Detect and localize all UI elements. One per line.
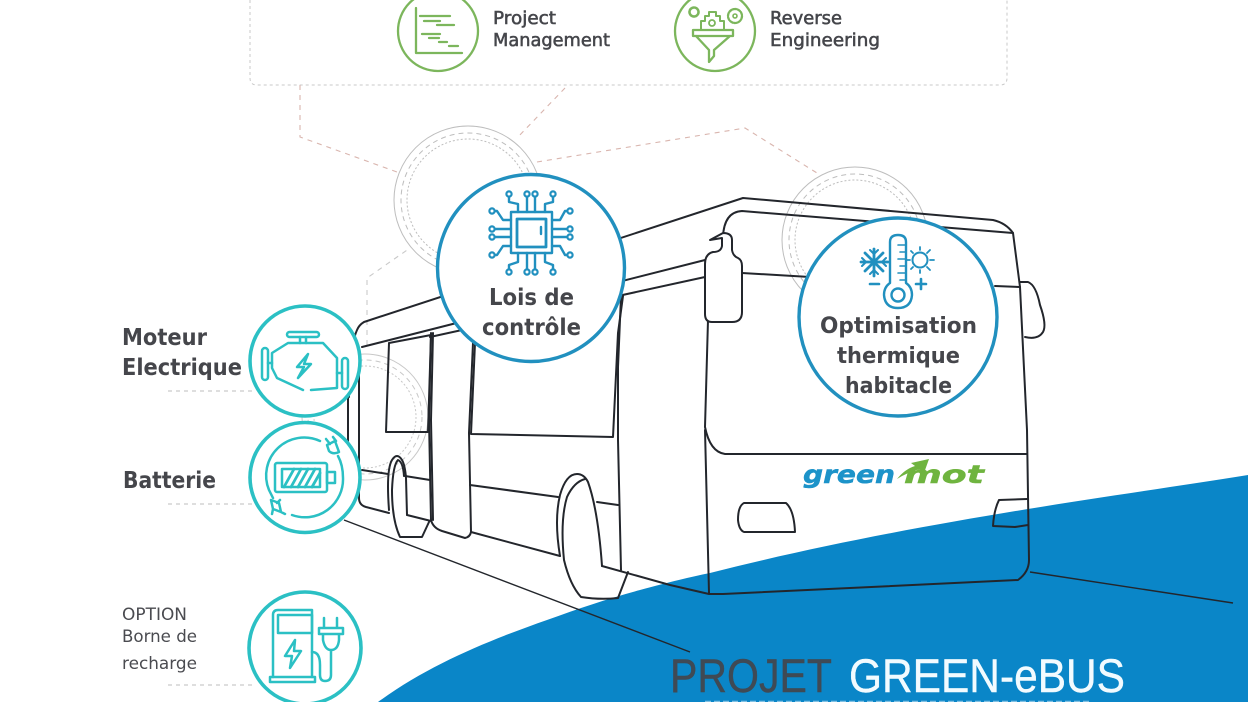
icon: thermometer with snow and sun — [861, 235, 934, 308]
label: electric motor: Moteur — [122, 325, 208, 351]
project title: GREEN-eBUS — [849, 649, 1125, 702]
left mirror — [705, 233, 742, 322]
label: charging station option: recharge — [122, 654, 197, 673]
decorative ring: powertrain — [302, 354, 428, 480]
icon: battery with charging cable — [250, 422, 360, 532]
door — [429, 333, 473, 538]
clipped subtitle strip — [705, 700, 1090, 702]
icon: engine — [250, 306, 360, 416]
label: project management: Project — [493, 9, 556, 29]
belt lines — [362, 470, 388, 474]
greenmot logo: mot — [904, 460, 986, 489]
electric motor item — [122, 306, 360, 416]
greenmot logo: green — [803, 460, 895, 489]
top services panel outline — [250, 0, 1007, 85]
icon: charging station — [249, 592, 361, 702]
icon: microchip — [489, 191, 573, 275]
body pillar — [618, 296, 621, 570]
label: thermal optimisation — [820, 314, 977, 399]
label: charging station option: Borne de — [122, 627, 197, 646]
project title: PROJET — [670, 649, 832, 702]
decorative ring: thermal — [782, 167, 928, 313]
large wheel — [557, 474, 602, 566]
small wheel — [388, 456, 407, 515]
label: project management — [493, 9, 610, 51]
charging station option item — [122, 592, 361, 702]
label: thermal optimisation: habitacle — [845, 374, 952, 399]
service: project management — [398, 0, 610, 71]
decorative ring: control laws — [394, 126, 542, 274]
icon: gantt chart — [398, 0, 478, 71]
callout: control laws — [438, 174, 624, 362]
destination band — [742, 273, 810, 277]
blue wave background — [378, 475, 1248, 702]
label: project management: Management — [493, 31, 610, 51]
dashed connector lines — [300, 85, 817, 345]
windshield — [723, 211, 1013, 237]
bus roof and side upper lines — [349, 198, 1029, 594]
lower sill — [407, 515, 431, 521]
icon: gears and funnel — [675, 0, 755, 71]
label: battery: Batterie — [123, 468, 216, 494]
label: control laws — [482, 285, 581, 341]
label: electric motor — [122, 325, 242, 381]
greenmot logo — [803, 459, 986, 489]
service: reverse engineering — [675, 0, 880, 71]
label: control laws: Lois de — [489, 285, 574, 311]
label: control laws: contrôle — [482, 315, 581, 341]
side window — [471, 296, 623, 437]
road lines — [344, 520, 1233, 652]
battery item — [123, 422, 360, 532]
rear edge — [359, 348, 389, 513]
callout: thermal optimisation — [799, 218, 997, 416]
label: charging station option — [122, 605, 197, 673]
bus line drawing — [348, 198, 1044, 599]
headlights — [738, 503, 795, 532]
project title — [670, 649, 1125, 702]
rear window — [386, 335, 431, 432]
label: thermal optimisation: thermique — [837, 344, 960, 369]
label: reverse engineering — [770, 9, 880, 51]
label: charging station option: OPTION — [122, 605, 187, 624]
label: thermal optimisation: Optimisation — [820, 314, 977, 339]
label: electric motor: Electrique — [122, 355, 242, 381]
right mirror — [1020, 282, 1044, 338]
label: reverse engineering: Engineering — [770, 31, 880, 51]
label: reverse engineering: Reverse — [770, 9, 842, 29]
